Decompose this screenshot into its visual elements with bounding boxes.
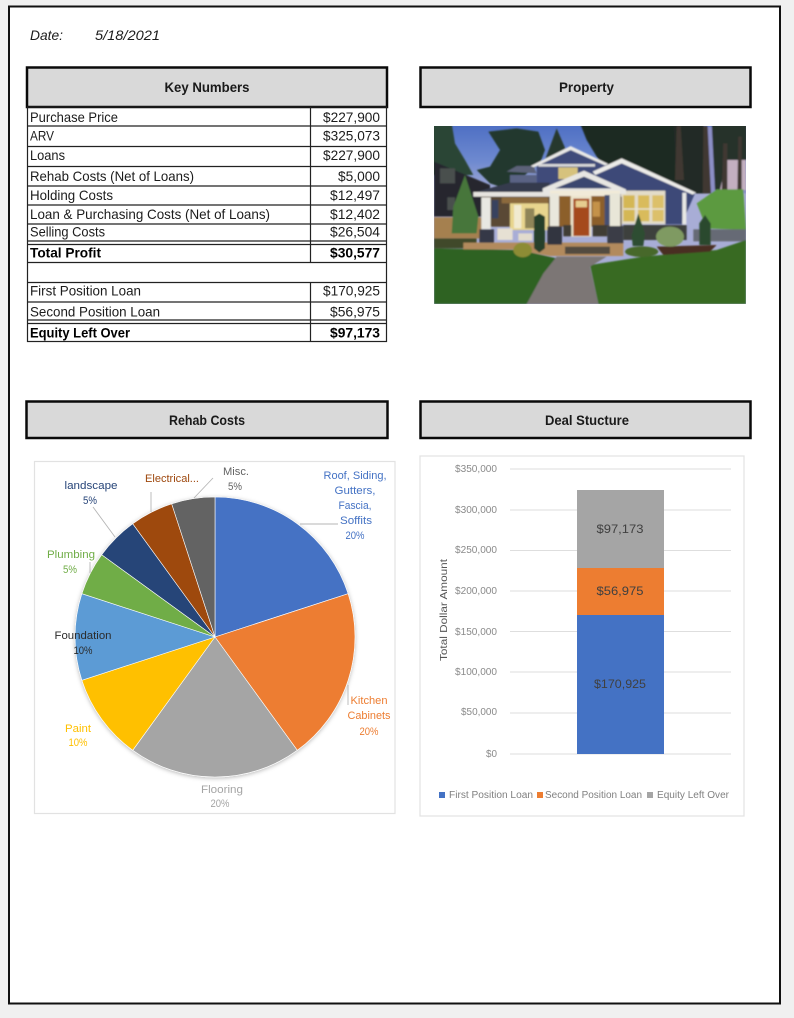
- pie labels: 5%: [63, 564, 77, 576]
- furniture and shrubs: [497, 228, 513, 240]
- table: key numbers: Rehab Costs (Net of Loans): [30, 168, 194, 184]
- y axis title: Total Dollar Amount: [438, 559, 450, 661]
- pie labels: 5%: [83, 495, 97, 507]
- porch roof: [480, 182, 550, 193]
- table: key numbers: Purchase Price: [30, 109, 118, 125]
- y axis labels: [455, 464, 497, 760]
- pie labels: Flooring: [201, 784, 243, 796]
- stacked bar: $170,925: [594, 677, 646, 691]
- stacked bar: [577, 490, 664, 754]
- stacked bar: $97,173: [596, 522, 644, 536]
- table: key numbers: $56,975: [330, 304, 380, 320]
- table: key numbers: $325,073: [323, 128, 380, 144]
- legend: [439, 790, 730, 801]
- pie labels: 20%: [360, 726, 379, 738]
- table: key numbers: Total Profit: [30, 244, 101, 260]
- panel: deal structure: [420, 402, 750, 816]
- legend: Equity Left Over: [657, 790, 730, 801]
- table: key numbers: $227,900: [323, 109, 380, 125]
- table: key numbers: [27, 107, 387, 342]
- pie labels: 5%: [228, 481, 242, 493]
- table: key numbers: ARV: [30, 128, 55, 144]
- table: key numbers: $5,000: [338, 168, 380, 184]
- date line: [30, 27, 160, 43]
- table: key numbers: Loans: [30, 147, 65, 163]
- table: key numbers: $170,925: [323, 282, 380, 298]
- heading: property: Property: [559, 79, 614, 95]
- date line: Date:: [30, 27, 63, 43]
- pie labels: 20%: [210, 798, 230, 810]
- heading: key numbers: [27, 68, 387, 107]
- pie labels: Foundation: [54, 630, 112, 642]
- heading: property: [420, 68, 750, 107]
- pie labels: Kitchen: [350, 695, 388, 707]
- pie labels: Paint: [65, 723, 91, 735]
- legend: First Position Loan: [449, 790, 533, 801]
- y axis labels: $0: [486, 749, 497, 760]
- pie labels: 20%: [346, 530, 365, 542]
- chart: rehab costs pie: [34, 462, 395, 814]
- table: key numbers: $12,402: [330, 206, 380, 222]
- pie labels: 10%: [68, 737, 88, 749]
- centre gable: [543, 171, 626, 194]
- table: key numbers: First Position Loan: [30, 282, 141, 298]
- pie labels: Gutters,: [334, 485, 376, 497]
- panel: rehab costs: [26, 402, 395, 814]
- y axis labels: $50,000: [461, 707, 497, 718]
- legend: Second Position Loan: [545, 790, 642, 801]
- upper storey and dormers: [510, 175, 537, 185]
- table: key numbers: $30,577: [330, 244, 380, 260]
- right gable: [606, 163, 696, 213]
- pie labels: Fascia,: [338, 500, 372, 512]
- table: key numbers: Holding Costs: [30, 187, 113, 203]
- y axis labels: $200,000: [455, 586, 497, 597]
- pie slices: [75, 497, 355, 777]
- pie labels: Roof, Siding,: [324, 470, 386, 482]
- heading: deal structure: Deal Stucture: [545, 412, 629, 428]
- pie labels: [47, 466, 391, 810]
- y axis labels: $150,000: [455, 627, 497, 638]
- table: key numbers: $97,173: [330, 324, 380, 340]
- pie labels: Electrical...: [145, 473, 199, 485]
- photo: craftsman house at dusk: [430, 123, 747, 304]
- table: key numbers: $26,504: [330, 224, 380, 240]
- panel: key numbers: [27, 68, 387, 342]
- table: key numbers: Equity Left Over: [30, 324, 131, 340]
- y axis labels: $300,000: [455, 505, 497, 516]
- columns: [481, 197, 491, 229]
- heading: rehab costs: [26, 402, 388, 438]
- pie labels: 10%: [74, 645, 93, 657]
- pie labels: Soffits: [340, 515, 373, 527]
- y axis labels: $350,000: [455, 464, 497, 475]
- panel: property: [420, 68, 750, 304]
- table: key numbers: Loan & Purchasing Costs (Net of Loans): [30, 206, 270, 222]
- pie labels: Plumbing: [47, 549, 95, 561]
- y axis labels: $250,000: [455, 545, 497, 556]
- table: key numbers: Second Position Loan: [30, 304, 160, 320]
- y axis labels: $100,000: [455, 667, 497, 678]
- heading: key numbers: Key Numbers: [164, 79, 250, 95]
- pie labels: Cabinets: [348, 710, 391, 722]
- heading: deal structure: [420, 402, 750, 438]
- chart: deal structure stacked bar: [420, 456, 744, 816]
- table: key numbers: $227,900: [323, 147, 380, 163]
- pie labels: Misc.: [223, 466, 249, 478]
- leader lines: [90, 478, 348, 705]
- heading: rehab costs: Rehab Costs: [169, 412, 245, 428]
- table: key numbers: Selling Costs: [30, 224, 105, 240]
- table: key numbers: $12,497: [330, 187, 380, 203]
- pie labels: landscape: [64, 480, 118, 492]
- date line: 5/18/2021: [95, 27, 160, 43]
- stacked bar: $56,975: [596, 584, 644, 598]
